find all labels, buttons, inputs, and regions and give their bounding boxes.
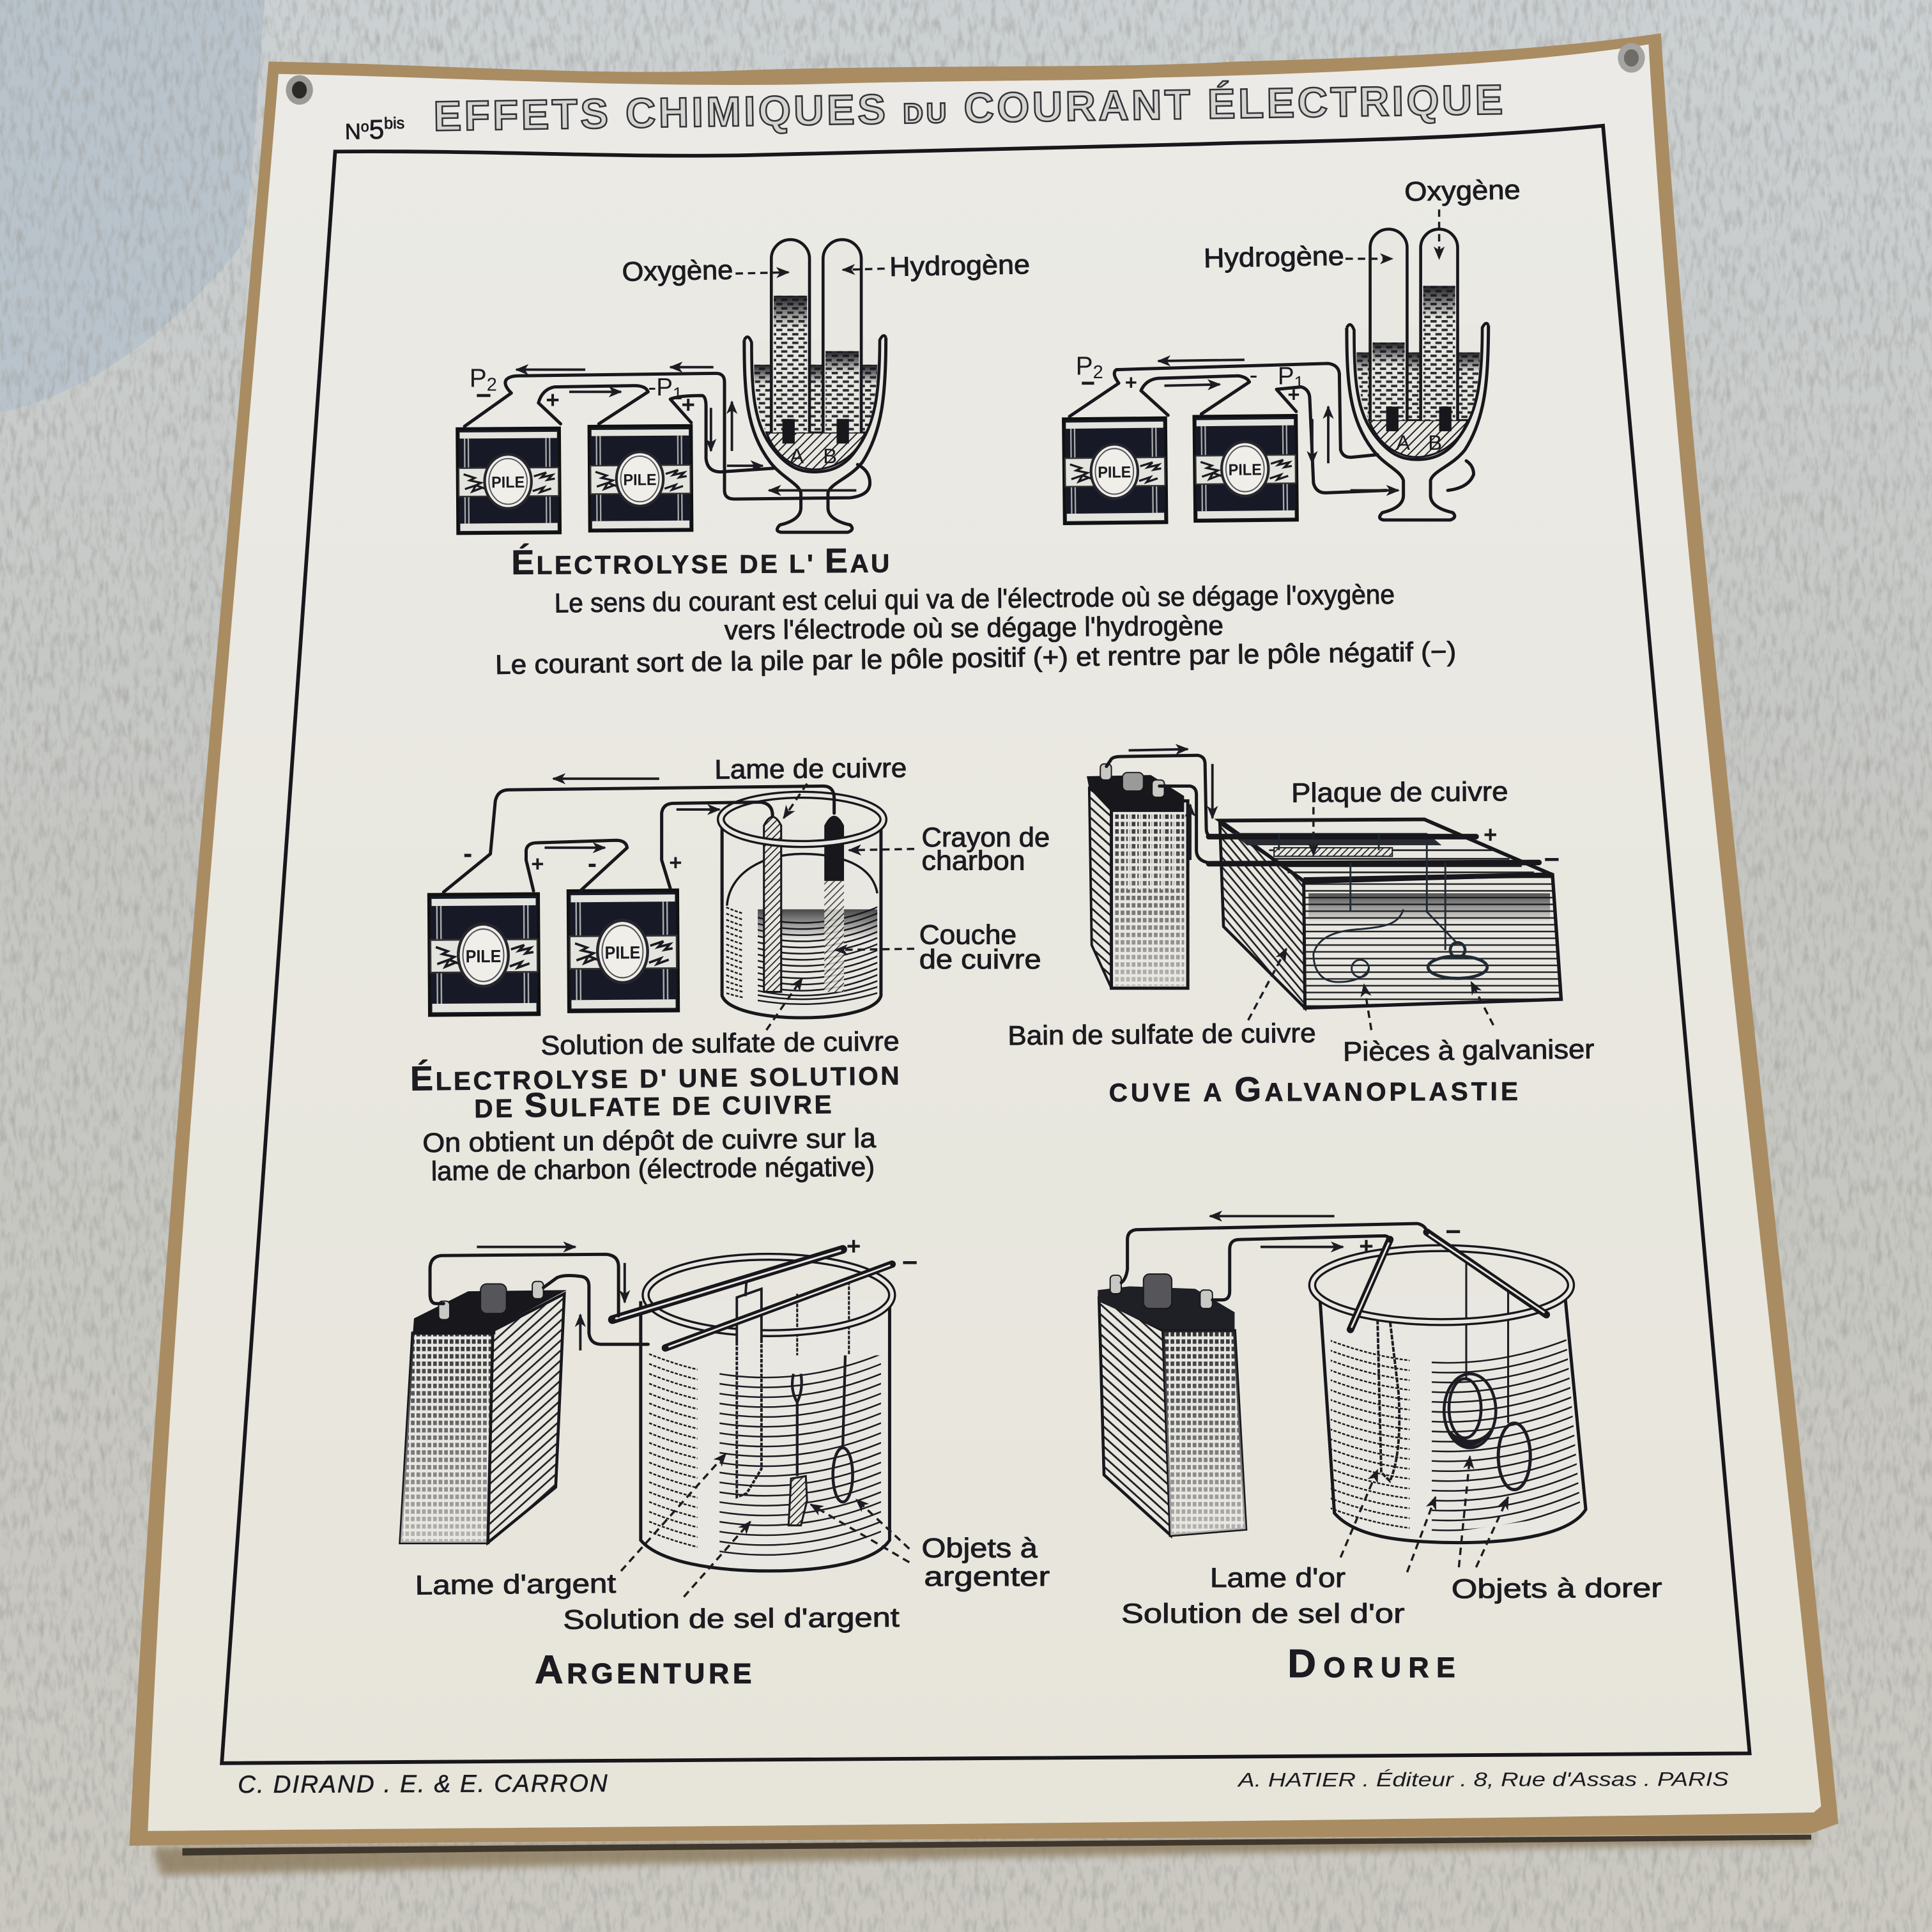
label: pieces a galvaniser: Pièces à galvaniser	[1343, 1034, 1595, 1066]
polarity labels: +	[1287, 383, 1300, 406]
negative rod	[1209, 862, 1539, 864]
beaker rim	[646, 1257, 892, 1333]
label: couche de cuivre	[836, 919, 1041, 974]
electrodes: A	[1396, 431, 1410, 454]
number label: bis	[384, 114, 404, 132]
polarity signs: +	[669, 851, 682, 875]
label: lame de cuivre	[714, 753, 907, 818]
wires	[430, 1254, 648, 1344]
label: oxygène: Oxygène	[1404, 174, 1521, 206]
battery 2	[589, 425, 692, 531]
current arrows	[477, 1247, 625, 1351]
test tube hydrogen	[1370, 229, 1407, 420]
polarity signs: -	[588, 848, 597, 878]
label: solution de sulfate de cuivre: Solution de sulfate de cuivre	[540, 1026, 900, 1061]
footer: authors: C. DIRAND . E. & E. CARRON	[238, 1770, 608, 1798]
polarity labels: 1	[673, 384, 682, 403]
polarity labels: -	[1250, 362, 1257, 389]
polarity labels: +	[546, 387, 560, 413]
beaker rim	[721, 795, 884, 844]
label: crayon de charbon: charbon	[922, 846, 1025, 876]
text block: depot de cuivre: lame de charbon (électrode négative)	[431, 1151, 875, 1186]
diagram: electrolyse de l'eau, right	[1063, 174, 1521, 524]
frame border	[222, 126, 1750, 1763]
label: couche de cuivre: Couche	[919, 919, 1016, 949]
heading: electrolyse de l'eau: ÉLECTROLYSE DE L' EAU	[511, 542, 889, 582]
accumulator	[1098, 1274, 1246, 1535]
label: solution de sel d'or	[1121, 1497, 1436, 1629]
battery 2: PILE	[604, 942, 640, 963]
small ring object	[1498, 1423, 1530, 1490]
battery 1: PILE	[491, 473, 525, 491]
battery 1	[429, 894, 539, 1015]
polarity labels	[1076, 351, 1304, 406]
label: pieces a galvaniser	[1343, 982, 1595, 1066]
label: solution de sulfate de cuivre	[540, 978, 900, 1061]
polarity signs	[1359, 1216, 1461, 1260]
diagram: electrolyse du sulfate de cuivre	[429, 753, 1050, 1061]
polarity signs: +	[531, 852, 544, 877]
battery 1	[1063, 418, 1167, 524]
polarity signs	[463, 838, 682, 878]
wires	[464, 373, 870, 499]
label: lame d'argent: Lame d'argent	[415, 1568, 617, 1600]
label: plaque de cuivre: Plaque de cuivre	[1291, 776, 1508, 808]
polarity labels: +	[1125, 370, 1137, 394]
hanging wires	[1466, 1261, 1508, 1423]
number label: o	[360, 118, 369, 135]
label: lame d'or: Lame d'or	[1210, 1563, 1346, 1593]
glass vessel	[744, 335, 886, 532]
number label: N	[344, 119, 361, 144]
label: hydrogène: Hydrogène	[889, 249, 1030, 282]
label: oxygène: Oxygène	[622, 255, 733, 287]
current arrows	[516, 367, 856, 491]
polarity signs: −	[1544, 845, 1560, 875]
test tube oxygen	[1421, 229, 1458, 420]
accumulator	[1087, 764, 1188, 988]
diagram: argenture	[401, 1232, 1050, 1635]
electrodes	[783, 419, 849, 468]
positive rod	[1351, 1239, 1390, 1330]
diagram: electrolyse de l'eau, left	[457, 240, 1030, 533]
label: objets a argenter: argenter	[924, 1561, 1050, 1591]
electrodes: B	[823, 444, 837, 468]
polarity labels: P	[1278, 363, 1294, 390]
title: EFFETS CHIMIQUES DU COURANT ÉLECTRIQUE	[433, 76, 1503, 139]
label: lame de cuivre: Lame de cuivre	[714, 753, 907, 785]
grommet: left	[286, 75, 313, 105]
diagram: cuve a galvanoplastie	[1008, 749, 1595, 1066]
text block: electrolysis explanation: Le courant sort de la pile par le pôle positif (+) et rentre par le pôle négatif (−)	[495, 636, 1457, 680]
beaker rim	[1312, 1248, 1571, 1322]
hanging wires and pieces	[1279, 834, 1487, 982]
wires	[1121, 1223, 1427, 1300]
text block: electrolysis explanation: Le sens du courant est celui qui va de l'électrode où se dégage l'oxygène	[554, 579, 1395, 618]
text block: depot de cuivre	[422, 1123, 877, 1186]
ring object	[1444, 1374, 1496, 1448]
polarity signs: +	[847, 1232, 861, 1260]
current arrows	[544, 779, 719, 848]
battery 2: PILE	[1229, 461, 1262, 479]
label: objets a dorer: Objets à dorer	[1452, 1573, 1662, 1604]
label: objets a argenter	[811, 1499, 1050, 1591]
number label: 5	[369, 114, 385, 144]
battery 2	[568, 890, 678, 1011]
positive rod	[1209, 835, 1476, 838]
glass vessel	[1347, 323, 1489, 520]
positive rod	[612, 1250, 843, 1320]
polarity labels: -P	[648, 374, 673, 401]
text block: electrolysis explanation	[495, 579, 1457, 680]
polarity signs: -	[463, 838, 472, 868]
copper plate	[1274, 848, 1392, 856]
electrodes	[1386, 406, 1452, 454]
hanging spoon and fork	[788, 1282, 853, 1526]
polarity labels: 1	[1294, 372, 1304, 392]
label: couche de cuivre: de cuivre	[919, 944, 1041, 974]
silver blade	[737, 1337, 762, 1497]
polarity labels: 2	[1093, 362, 1103, 383]
heading: electrolyse d'une solution: DE SULFATE DE CUIVRE	[474, 1082, 832, 1125]
negative rod	[665, 1264, 892, 1348]
label: crayon de charbon	[849, 822, 1050, 876]
current arrows	[1158, 360, 1399, 491]
battery 2: PILE	[623, 471, 657, 489]
electrodes: B	[1428, 431, 1442, 454]
label: bain de sulfate de cuivre	[1008, 949, 1316, 1050]
label: lame d'argent	[415, 1454, 726, 1600]
diagram: dorure	[1098, 1216, 1662, 1629]
polarity signs: −	[1445, 1216, 1461, 1246]
polarity labels: P	[1076, 351, 1093, 380]
polarity labels: P	[470, 364, 487, 393]
polarity labels	[470, 364, 695, 418]
footer: publisher: A. HATIER . Éditeur . 8, Rue d'Assas . PARIS	[1237, 1768, 1729, 1791]
polarity signs: +	[1483, 822, 1497, 848]
battery 1	[457, 428, 560, 533]
wires	[1107, 755, 1213, 862]
battery 1: PILE	[466, 946, 501, 967]
beaker	[1320, 1294, 1586, 1543]
polarity signs: +	[1359, 1232, 1374, 1260]
test tube hydrogen	[823, 240, 861, 433]
label: objets a dorer	[1452, 1457, 1662, 1604]
charcoal electrode	[824, 816, 844, 992]
polarity labels: +	[681, 392, 695, 418]
text block: depot de cuivre: On obtient un dépôt de cuivre sur la	[422, 1123, 877, 1158]
label: solution de sel d'argent	[563, 1522, 900, 1635]
battery 2	[1194, 415, 1298, 521]
heading: argenture: ARGENTURE	[535, 1648, 751, 1692]
gold blade	[1377, 1320, 1399, 1481]
negative rod	[1427, 1232, 1546, 1315]
electrodes: A	[790, 444, 804, 468]
heading: electrolyse d'une solution: ÉLECTROLYSE D' UNE SOLUTION	[410, 1054, 900, 1098]
copper strip electrode	[764, 817, 781, 992]
heading: dorure: D ORURE	[1287, 1642, 1455, 1686]
test tube oxygen	[771, 240, 809, 433]
tank	[1220, 819, 1561, 1008]
label: crayon de charbon: Crayon de	[922, 822, 1050, 852]
beaker	[641, 1301, 889, 1571]
beaker	[722, 823, 881, 1018]
label: objets a argenter: Objets à	[922, 1533, 1038, 1563]
polarity signs: −	[902, 1247, 917, 1277]
heading: cuve a galvanoplastie: CUVE A GALVANOPLASTIE	[1109, 1070, 1518, 1109]
accumulator	[401, 1282, 567, 1543]
current arrows	[1129, 749, 1213, 860]
label: bain de sulfate de cuivre: Bain de sulfate de cuivre	[1008, 1018, 1316, 1050]
hook plate	[737, 1278, 762, 1343]
grommet: right	[1618, 43, 1645, 73]
wires	[1070, 364, 1474, 493]
text block: electrolysis explanation: vers l'électrode où se dégage l'hydrogène	[724, 610, 1223, 645]
polarity signs	[847, 1232, 917, 1277]
polarity signs	[1483, 822, 1560, 875]
label: hydrogène: Hydrogène	[1204, 241, 1344, 273]
polarity labels: 2	[487, 374, 497, 395]
heading: electrolyse d'une solution	[410, 1054, 900, 1125]
wires	[443, 786, 834, 892]
battery 1: PILE	[1098, 463, 1131, 482]
label: solution de sel d'argent: Solution de sel d'argent	[563, 1602, 900, 1635]
current arrows	[1210, 1216, 1343, 1247]
label: solution de sel d'or: Solution de sel d'or	[1121, 1598, 1405, 1629]
label: lame d'or	[1210, 1470, 1377, 1593]
